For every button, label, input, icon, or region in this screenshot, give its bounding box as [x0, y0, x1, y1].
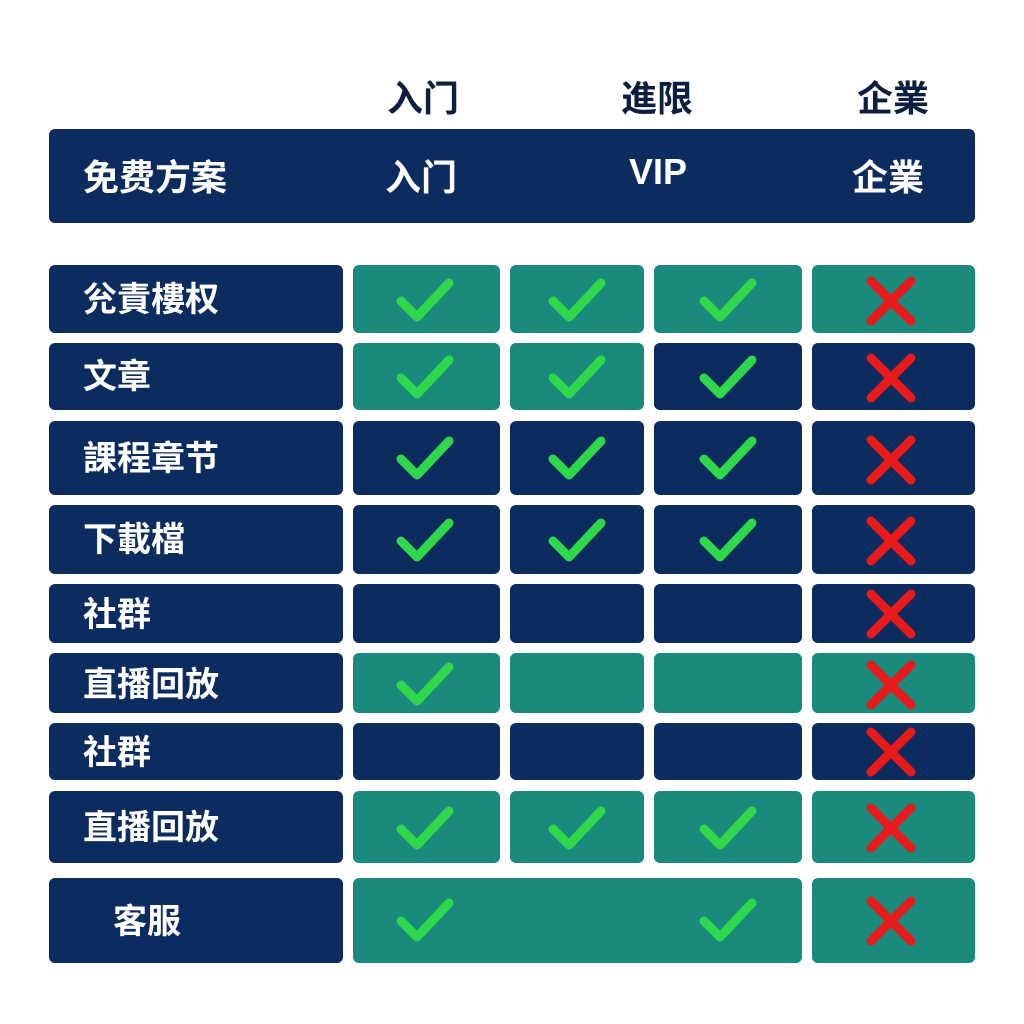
row 9: 客服: [113, 903, 181, 941]
row 6: 直播回放: [83, 666, 219, 704]
row 3: [49, 421, 975, 495]
row 9: [49, 878, 975, 963]
row 6: [49, 653, 975, 713]
row 1: [49, 265, 975, 333]
row 7: [49, 723, 975, 780]
comparison table: [49, 265, 975, 963]
header labels: 入门: [385, 157, 457, 198]
row 2: [49, 343, 975, 410]
row 4: [49, 505, 975, 574]
row 5: [49, 584, 975, 643]
header labels: [83, 151, 924, 198]
column heading: 入门: 入门: [387, 78, 459, 119]
row 7: 社群: [83, 734, 151, 772]
row 3: 課程章节: [83, 440, 219, 478]
row 1: 兊責樓权: [83, 281, 219, 319]
row 8: [49, 791, 975, 863]
header bar: [49, 129, 975, 223]
header labels: 免费方案: [83, 157, 227, 198]
column heading: 企業: 企業: [857, 78, 929, 119]
row 8: 直播回放: [83, 809, 219, 847]
header labels: 企業: [852, 157, 924, 198]
row 4: 下載檔: [83, 521, 185, 559]
row 2: 文章: [83, 358, 151, 396]
column heading: 進限: 進限: [621, 78, 693, 119]
header labels: VIP: [629, 151, 687, 192]
row 5: 社群: [83, 596, 151, 634]
